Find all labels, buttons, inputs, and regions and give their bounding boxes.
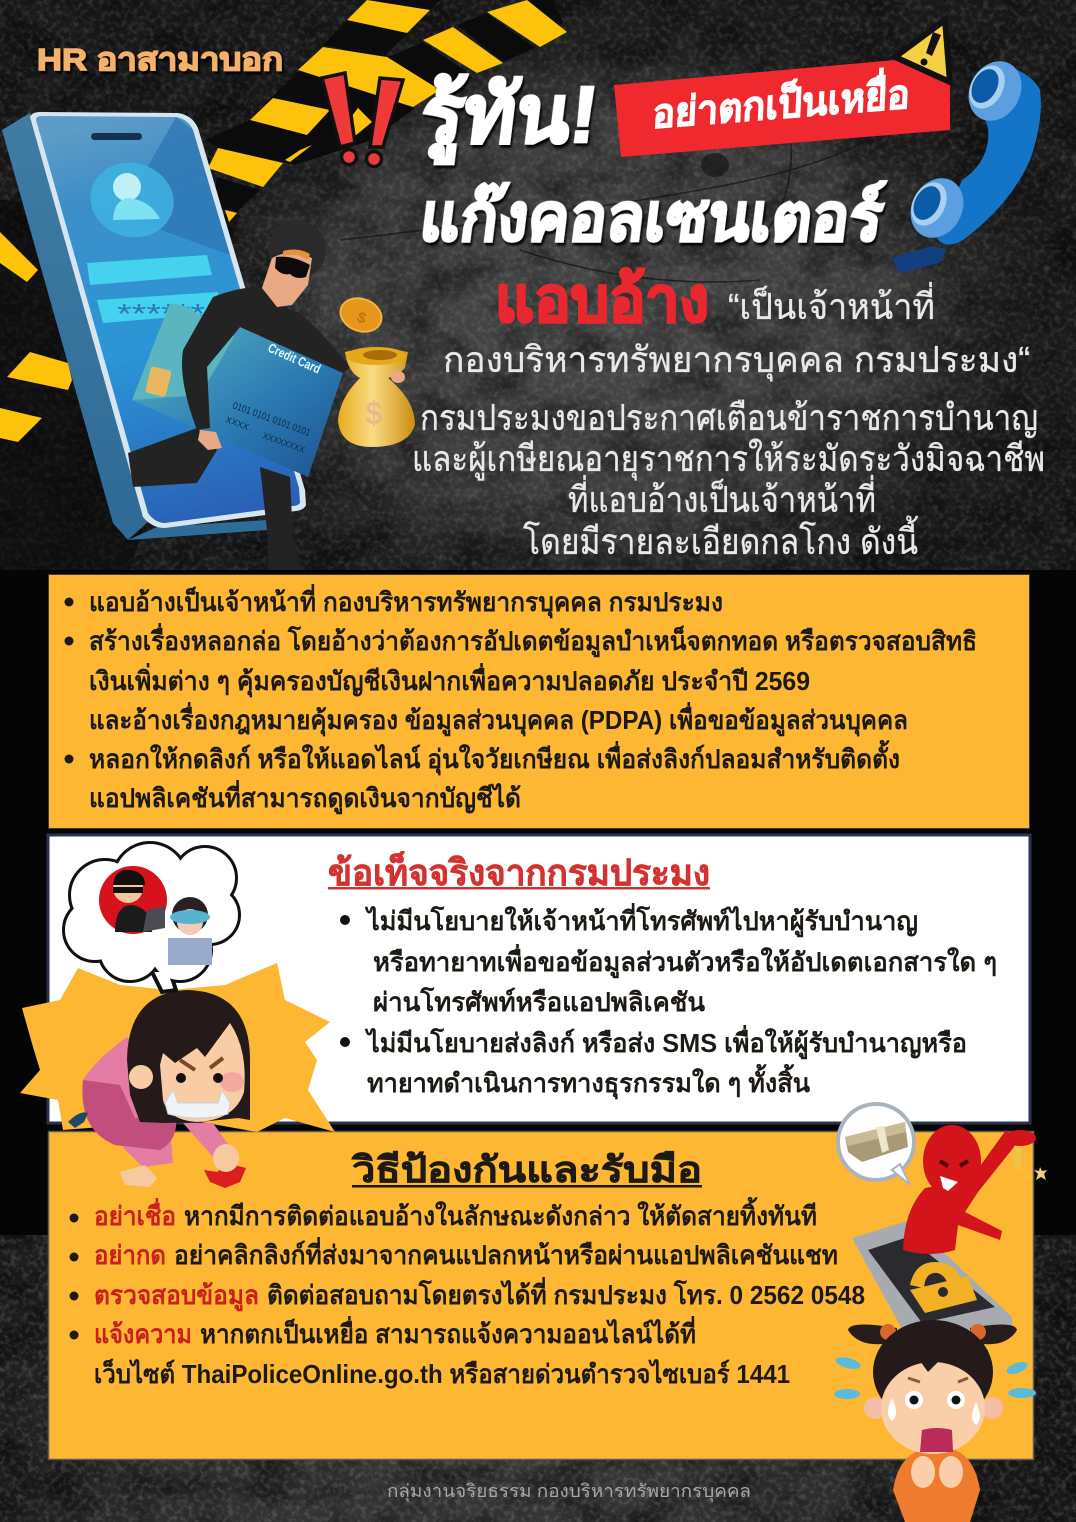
facts text <box>364 902 997 1100</box>
red figure <box>903 1125 1036 1254</box>
illustration: coin and money bag: $ <box>355 309 369 328</box>
facts text: ไม่มีนโยบายให้เจ้าหน้าที่โทรศัพท์ไปหาผู้รับบำนาญ <box>364 902 918 938</box>
bullets <box>340 915 350 1047</box>
panel: scam tactics <box>48 574 1030 828</box>
text block: notice from department: โดยมีรายละเอียดกลโกง ดังนี้ <box>523 515 919 562</box>
advice: do not believe: อย่าเชื่อ <box>94 1197 176 1231</box>
facts text: หรือทายาทเพื่อขอข้อมูลส่วนตัวหรือให้อัปเดตเอกสารใด ๆ <box>373 943 997 979</box>
icon: telephone handset <box>892 52 1041 273</box>
icon: red double exclamation <box>322 73 403 166</box>
facts text: ไม่มีนโยบายส่งลิงก์ หรือส่ง SMS เพื่อให้ผู้รับบำนาญหรือ <box>364 1024 967 1060</box>
sweat drops <box>834 1355 1036 1399</box>
advice: report <box>94 1315 790 1389</box>
illustration: angry girl with burst <box>20 844 335 1188</box>
subheading: impersonation warning: กองบริหารทรัพยากรบุคคล กรมประมง“ <box>443 339 1030 382</box>
credit card: 0101 0101 0101 0101 <box>231 400 312 439</box>
subheading: impersonation warning: “เป็นเจ้าหน้าที่ <box>728 282 935 327</box>
illustration: coin and money bag <box>336 293 415 447</box>
key <box>1014 1146 1021 1170</box>
illustration: smartphone: ****** <box>117 298 205 329</box>
text block: notice from department <box>412 397 1045 562</box>
title: แก๊งคอลเซนเตอร์: แก๊งคอลเซนเตอร์ <box>416 180 888 255</box>
head <box>268 221 326 279</box>
tactics text: สร้างเรื่องหลอกล่อ โดยอ้างว่าต้องการอัปเดตข้อมูลบำเหน็จตกทอด หรือตรวจสอบสิทธิ <box>89 622 977 658</box>
advice: report: เว็บไซต์ ThaiPoliceOnline.go.th หรือสายด่วนตำรวจไซเบอร์ 1441 <box>94 1358 790 1389</box>
subheading: impersonation warning: แอบอ้าง <box>495 266 709 335</box>
advice: do not press: อย่ากด <box>94 1240 166 1270</box>
caution tape <box>0 0 567 442</box>
star <box>1034 1167 1047 1180</box>
advice: verify: ตรวจสอบข้อมูล <box>94 1280 259 1312</box>
panel: prevention and response <box>48 1132 1034 1460</box>
tactics text: และอ้างเรื่องกฎหมายคุ้มครอง ข้อมูลส่วนบุคคล (PDPA) เพื่อขอข้อมูลส่วนบุคคล <box>89 701 908 737</box>
facts text: ทายาทดำเนินการทางธุรกรรมใด ๆ ทั้งสิ้น <box>367 1063 810 1100</box>
credit card: XXXX <box>224 414 250 432</box>
illustration: smartphone <box>2 112 306 540</box>
icon: warning triangle <box>895 20 950 82</box>
advice: report: แจ้งความ <box>94 1319 192 1349</box>
speech bubble with money <box>838 1104 914 1185</box>
illustration: thief with credit card <box>128 221 350 570</box>
illustration: red hacker emerging from phone <box>838 1104 1047 1358</box>
tactics text: แอบอ้างเป็นเจ้าหน้าที่ กองบริหารทรัพยากรบุคคล กรมประมง <box>89 583 723 619</box>
advice: report: หากตกเป็นเหยื่อ สามารถแจ้งความออนไลน์ได้ที่ <box>200 1315 696 1349</box>
banner: อย่าตกเป็นเหยื่อ <box>614 60 950 157</box>
bullets <box>64 598 74 764</box>
credit card: XXXXXXXX <box>261 430 306 455</box>
illustration: shocked child <box>834 1320 1036 1522</box>
illustration: coin and money bag: $ <box>365 395 383 431</box>
arm and torso <box>182 287 350 430</box>
advice: verify <box>94 1276 865 1312</box>
credit card <box>132 303 343 477</box>
footer credit: กลุ่มงานจริยธรรม กองบริหารทรัพยากรบุคคล <box>387 1481 751 1502</box>
facts text: ผ่านโทรศัพท์หรือแอปพลิเคชัน <box>373 986 705 1017</box>
text block: notice from department: ที่แอบอ้างเป็นเจ้าหน้าที่ <box>568 475 876 520</box>
advice: do not press: อย่าคลิกลิงก์ที่ส่งมาจากคนแปลกหน้าหรือผ่านแอปพลิเคชันแชท <box>174 1236 838 1270</box>
heading: facts: ข้อเท็จจริงจากกรมประมง <box>328 850 710 893</box>
panel: facts from the department <box>48 835 1030 1123</box>
tactics text: แอปพลิเคชันที่สามารถดูดเงินจากบัญชีได้ <box>89 779 521 815</box>
tactics text: เงินเพิ่มต่าง ๆ คุ้มครองบัญชีเงินฝากเพื่อความปลอดภัย ประจำปี 2569 <box>89 662 810 698</box>
body <box>83 1037 173 1167</box>
thought bubble <box>65 844 238 992</box>
bullets <box>70 1214 78 1340</box>
head <box>127 990 250 1123</box>
tactics text <box>89 583 977 815</box>
banner: อย่าตกเป็นเหยื่อ: อย่าตกเป็นเหยื่อ <box>652 65 911 137</box>
heading: prevention: วิธีป้องกันและรับมือ <box>351 1149 702 1190</box>
advice: do not believe: หากมีการติดต่อแอบอ้างในลักษณะดังกล่าว ให้ตัดสายทิ้งทันที <box>184 1196 817 1231</box>
heading: HR อาสามาบอก: HR อาสามาบอก <box>37 42 283 77</box>
title: รู้ทัน!: รู้ทัน! <box>415 70 603 165</box>
subheading: impersonation warning <box>443 266 1030 382</box>
tactics text: หลอกให้กดลิงก์ หรือให้แอดไลน์ อุ่นใจวัยเกษียณ เพื่อส่งลิงก์ปลอมสำหรับติดตั้ง <box>89 739 900 776</box>
advice: verify: ติดต่อสอบถามโดยตรงได้ที่ กรมประมง โทร. 0 2562 0548 <box>267 1276 865 1310</box>
legs <box>128 428 217 487</box>
credit card: Credit Card <box>266 340 323 377</box>
